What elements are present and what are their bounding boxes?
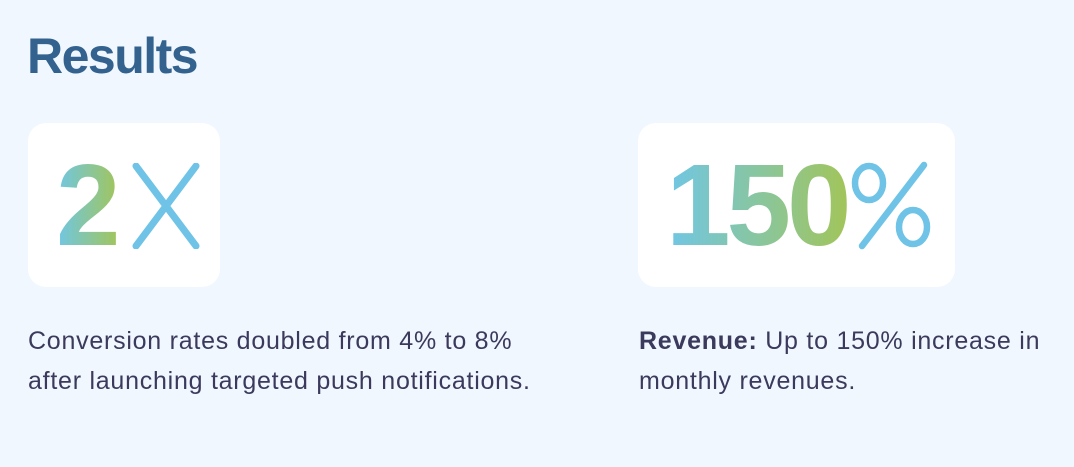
text: revenue: monthly revenues. bbox=[639, 367, 856, 395]
card: 150% bbox=[638, 123, 955, 287]
text: revenue: Revenue: Up to 150% increase in bbox=[639, 327, 1040, 355]
text: conversion: Conversion rates doubled from 4% to 8% bbox=[28, 327, 512, 355]
text: conversion bbox=[28, 327, 531, 395]
card: 2X bbox=[28, 123, 220, 287]
title: Results bbox=[27, 28, 197, 84]
percent sign bbox=[852, 162, 930, 250]
number 2: 2 bbox=[56, 140, 119, 270]
letter X bbox=[132, 163, 200, 249]
number 150: 150 bbox=[666, 140, 848, 270]
text: revenue bbox=[639, 327, 1040, 395]
text: conversion: after launching targeted push notifications. bbox=[28, 367, 531, 395]
